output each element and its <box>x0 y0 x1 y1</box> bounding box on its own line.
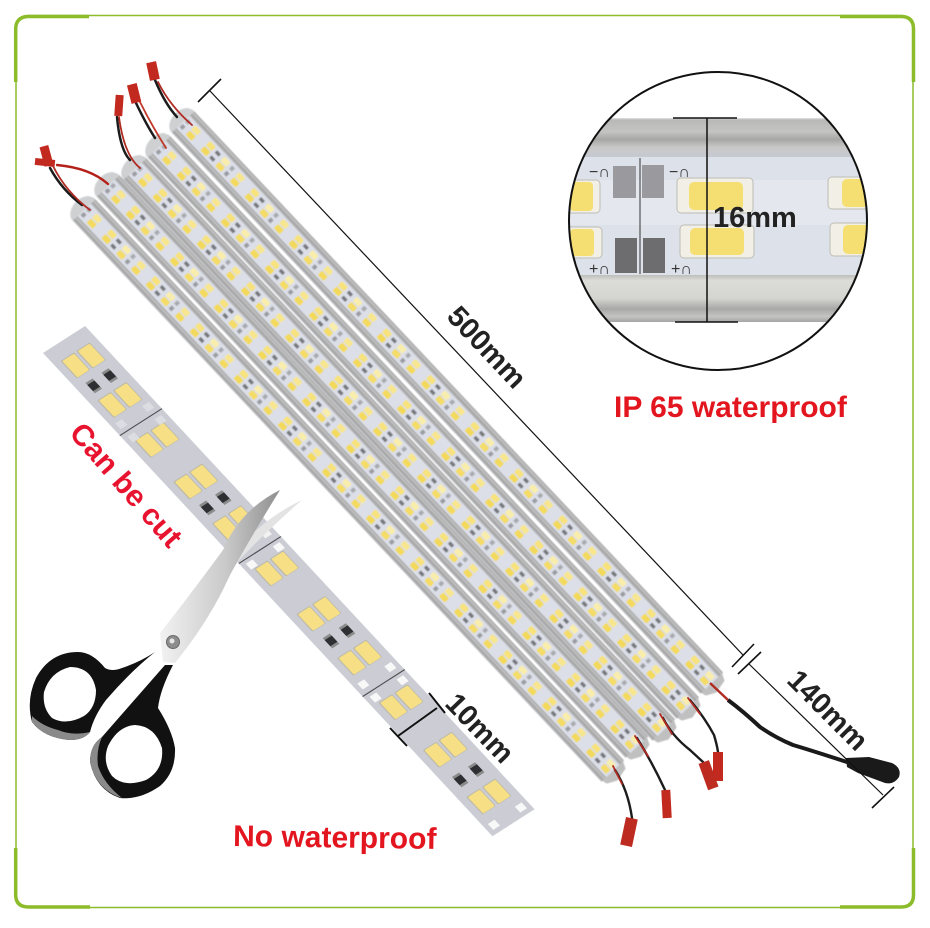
polarity marks: +∩ <box>671 261 692 278</box>
bar 5 <box>164 103 730 701</box>
10mm width marker <box>390 693 445 746</box>
bar 4 <box>140 128 706 726</box>
polarity marks: −∩ <box>669 164 690 181</box>
top wires and connectors <box>35 61 192 210</box>
label: No waterproof: No waterproof <box>233 820 438 856</box>
solder pads <box>115 402 527 830</box>
DC power cable and jack <box>710 683 900 783</box>
label: 10mm: 10mm <box>439 687 520 770</box>
right handle <box>90 665 175 798</box>
16mm dimension line <box>673 118 738 322</box>
polarity marks: −∩ <box>589 164 610 181</box>
pads <box>613 165 665 273</box>
heading: IP 65 waterproof: IP 65 waterproof <box>614 391 848 424</box>
LEDs <box>560 177 880 258</box>
bar 2 <box>89 167 655 765</box>
label: 500mm: 500mm <box>440 300 532 395</box>
label: Can be cut: Can be cut <box>63 417 188 554</box>
label: 140mm: 140mm <box>781 664 874 757</box>
strip LEDs <box>61 342 512 815</box>
dimension lines <box>198 79 894 808</box>
bar 1 <box>65 191 631 789</box>
LED light bars group <box>65 103 730 789</box>
strip resistors <box>85 368 485 787</box>
polarity marks <box>589 164 692 278</box>
panel: bare LED strip <box>43 326 535 836</box>
icon: scissors <box>30 490 302 798</box>
label: 16mm: 16mm <box>713 202 797 234</box>
bar 3 <box>116 150 682 748</box>
panel: waterproof close-up lens <box>560 72 880 370</box>
left handle <box>30 642 155 740</box>
polarity marks: +∩ <box>589 261 610 278</box>
bottom wires and connectors <box>613 698 723 847</box>
